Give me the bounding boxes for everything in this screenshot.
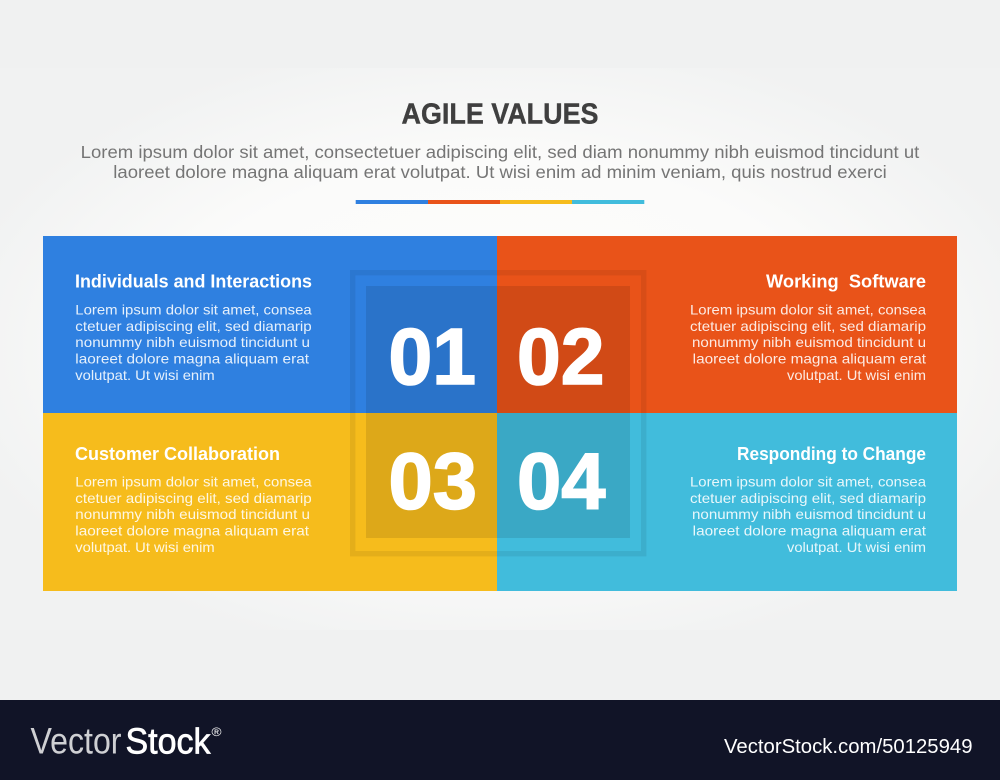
footer image id: VectorStock.com/50125949 — [724, 736, 972, 758]
text block: responding to change: nonummy nibh euismod tincidunt u — [692, 507, 926, 522]
heading: individuals and interactions: Individuals and Interactions — [75, 271, 312, 292]
text block: working software: Lorem ipsum dolor sit amet, consea — [690, 303, 926, 318]
text block: individuals and interactions: nonummy nibh euismod tincidunt u — [75, 335, 310, 350]
text block: working software — [690, 303, 926, 383]
numbers: 04 — [517, 436, 606, 526]
text block: individuals and interactions: Lorem ipsum dolor sit amet, consea — [75, 303, 312, 318]
footer logo: ® — [212, 725, 222, 739]
numbers: 02 — [517, 312, 604, 401]
text block: customer collaboration: volutpat. Ut wisi enim — [75, 540, 215, 555]
text block: responding to change: volutpat. Ut wisi enim — [787, 540, 926, 555]
panel: responding to change — [497, 413, 957, 591]
text block: responding to change: laoreet dolore magna aliquam erat — [693, 524, 926, 538]
text block: individuals and interactions: laoreet dolore magna aliquam erat — [75, 352, 309, 366]
panel: working software — [497, 236, 957, 413]
text block: responding to change: Lorem ipsum dolor sit amet, consea — [690, 475, 926, 490]
footer logo: Vector — [30, 720, 122, 761]
text block: customer collaboration — [75, 475, 312, 555]
footer logo — [30, 720, 222, 761]
numbers: 01 — [388, 312, 476, 401]
text block: responding to change: ctetuer adipiscing elit, sed diamarip — [690, 491, 926, 506]
text block: working software: ctetuer adipiscing elit, sed diamarip — [690, 319, 926, 334]
panel: individuals and interactions — [43, 236, 497, 413]
footer logo: Stock — [126, 720, 211, 761]
subtitle text: laoreet dolore magna aliquam erat volutpat. Ut wisi enim ad minim veniam, quis nostrud exerci — [113, 162, 887, 182]
text block: working software: laoreet dolore magna aliquam erat — [693, 352, 926, 366]
text block: customer collaboration: ctetuer adipiscing elit, sed diamarip — [75, 491, 312, 506]
subtitle text — [81, 142, 920, 182]
heading: working software: Working Software — [766, 271, 926, 292]
text block: individuals and interactions — [75, 303, 312, 383]
text block: customer collaboration: nonummy nibh euismod tincidunt u — [75, 507, 310, 522]
text block: individuals and interactions: volutpat. Ut wisi enim — [75, 368, 215, 383]
text block: individuals and interactions: ctetuer adipiscing elit, sed diamarip — [75, 319, 312, 334]
heading: responding to change: Responding to Change — [737, 443, 926, 464]
four-colour divider — [356, 200, 644, 204]
text block: customer collaboration: laoreet dolore magna aliquam erat — [75, 524, 309, 538]
footer bar — [0, 700, 1000, 780]
text block: customer collaboration: Lorem ipsum dolor sit amet, consea — [75, 475, 312, 490]
centre overlay squares — [353, 273, 644, 554]
numbers — [388, 312, 606, 526]
heading: customer collaboration: Customer Collaboration — [75, 443, 280, 464]
text block: working software: volutpat. Ut wisi enim — [787, 368, 926, 383]
numbers: 03 — [388, 436, 477, 526]
panel: customer collaboration — [43, 413, 497, 591]
subtitle text: Lorem ipsum dolor sit amet, consectetuer adipiscing elit, sed diam nonummy nibh euismod tincidunt ut — [81, 142, 920, 162]
text block: working software: nonummy nibh euismod tincidunt u — [692, 335, 926, 350]
text block: responding to change — [690, 475, 926, 555]
title: AGILE VALUES — [402, 98, 598, 130]
